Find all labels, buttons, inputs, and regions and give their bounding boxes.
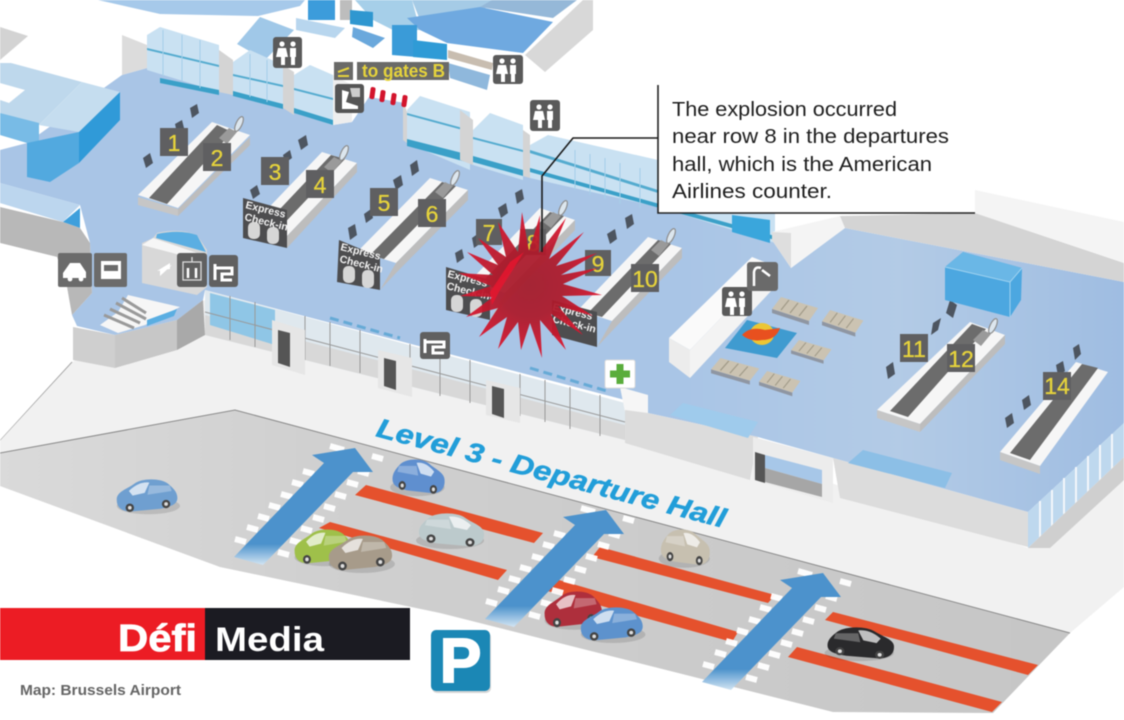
counter 14 <box>1000 362 1108 474</box>
right facade wall <box>625 403 1124 548</box>
number badges: 5 <box>378 190 390 216</box>
escalator <box>100 295 180 333</box>
number badges: 2 <box>211 145 223 171</box>
left white entrance <box>0 243 73 440</box>
icon: first aid <box>605 360 635 388</box>
counters 1-2 <box>138 115 250 216</box>
car silver <box>416 513 484 549</box>
icon: toilets 1 <box>273 37 302 68</box>
far right roof <box>975 190 1124 263</box>
number badges: 1 <box>168 130 180 156</box>
callout box <box>658 85 975 213</box>
counters 5-6: Express <box>339 241 382 263</box>
car black <box>825 627 894 661</box>
crosswalk arrow 1 <box>234 446 383 565</box>
counters 11-12 <box>877 317 1005 432</box>
car blue left <box>117 479 180 514</box>
number badges: 11 <box>902 336 926 362</box>
small dark overhead screens <box>143 104 1081 428</box>
red gate markers <box>369 87 408 107</box>
counters 7-8 <box>445 199 575 320</box>
glass corner <box>1028 423 1124 548</box>
number badges: 9 <box>592 251 604 277</box>
white pier <box>620 387 648 417</box>
top-left grey roof <box>0 27 28 60</box>
seats <box>711 297 863 396</box>
number badges: 6 <box>426 201 438 227</box>
door 1 <box>272 320 305 375</box>
main floor <box>0 68 1124 512</box>
callout text: The explosion occurred <box>672 98 897 121</box>
glass B <box>233 50 283 109</box>
counters 3-4 <box>243 144 357 248</box>
car red <box>545 592 604 630</box>
departure front facade left <box>205 290 648 440</box>
icon: luggage 2 <box>420 332 450 359</box>
number badges: 4 <box>314 172 327 198</box>
heading: Level 3 - Departure Hall: Level 3 - Departure Hall <box>373 413 730 534</box>
number badges <box>160 128 1071 400</box>
apron and kerb <box>0 300 1124 633</box>
glass A <box>147 27 219 95</box>
road kerb line <box>0 410 1070 633</box>
number badges: 12 <box>948 346 974 372</box>
blue glass cube right <box>945 252 1022 317</box>
door portal <box>753 437 833 503</box>
callout text: near row 8 in the departures <box>672 125 949 148</box>
callout leader line <box>542 138 658 252</box>
icon: shower <box>747 262 778 291</box>
glass D <box>407 96 470 170</box>
car green <box>295 529 354 566</box>
callout text <box>672 98 949 203</box>
left blue wall strip <box>0 183 80 228</box>
Défi Media banner: Défi <box>118 618 197 660</box>
explosion starburst <box>458 212 602 358</box>
counters 5-6: Check-in <box>338 253 384 276</box>
counters 9-10 <box>551 227 682 347</box>
counters 7-8: Express <box>446 268 489 290</box>
counters 9-10: Express <box>551 301 594 323</box>
icon: luggage 1 <box>209 255 238 287</box>
corner wall block right of glass <box>772 216 845 268</box>
carpet with orange logo <box>725 320 797 358</box>
icon: passport control <box>335 84 364 113</box>
parked cars <box>117 459 894 661</box>
central white wall <box>669 257 772 378</box>
far glass wall sections <box>122 27 775 243</box>
crosswalk arrow 2 <box>485 508 634 627</box>
glass F <box>530 135 775 243</box>
icon: toilets 2 <box>493 55 523 84</box>
far right wall band <box>840 213 1124 282</box>
road surface <box>0 410 1070 713</box>
lower grey wall below escalator <box>73 300 205 368</box>
counters 3-4: Express <box>244 199 287 221</box>
number badges: 10 <box>632 266 658 292</box>
car blue front <box>581 607 645 643</box>
number badges: 3 <box>269 159 281 185</box>
icon: toilets 3 <box>530 100 560 131</box>
glass opening 2 <box>848 450 952 488</box>
left grey curved wall <box>0 207 92 315</box>
left blue glass block <box>0 63 120 182</box>
callout text: Airlines counter. <box>672 180 832 203</box>
elevator tower <box>142 231 207 295</box>
upper building: far blue skylights <box>98 0 593 90</box>
door 3 <box>486 380 520 423</box>
counters 7-8: Check-in <box>445 280 491 303</box>
orange road stripes <box>319 485 1038 712</box>
glass E <box>473 113 523 180</box>
car tan <box>329 536 395 573</box>
number badges: 14 <box>1044 373 1070 399</box>
car blue angled <box>390 459 445 496</box>
icon: parking: P <box>440 627 481 696</box>
icon: lift <box>177 253 207 287</box>
counters 9-10: Check-in <box>551 313 597 336</box>
glass C <box>294 65 333 125</box>
Défi Media banner: Media <box>215 621 325 659</box>
icon: parking <box>431 627 491 696</box>
counters 3-4: Check-in <box>243 211 289 234</box>
door 2 <box>378 350 412 397</box>
counters 5-6 <box>337 169 468 290</box>
icon: toilets 4 <box>722 287 752 316</box>
car beige <box>659 530 710 568</box>
glass opening 1 <box>670 403 758 438</box>
callout text: hall, which is the American <box>672 153 932 176</box>
icon: taxi <box>58 253 92 287</box>
gates sign: to gates B <box>362 61 445 81</box>
Défi Media banner <box>0 608 410 660</box>
map credit: Map: Brussels Airport <box>20 682 181 699</box>
crosswalk arrow 3 <box>702 571 851 690</box>
number badges: 8 <box>527 230 539 256</box>
icon: bus <box>94 253 127 287</box>
number badges: 7 <box>483 220 495 246</box>
